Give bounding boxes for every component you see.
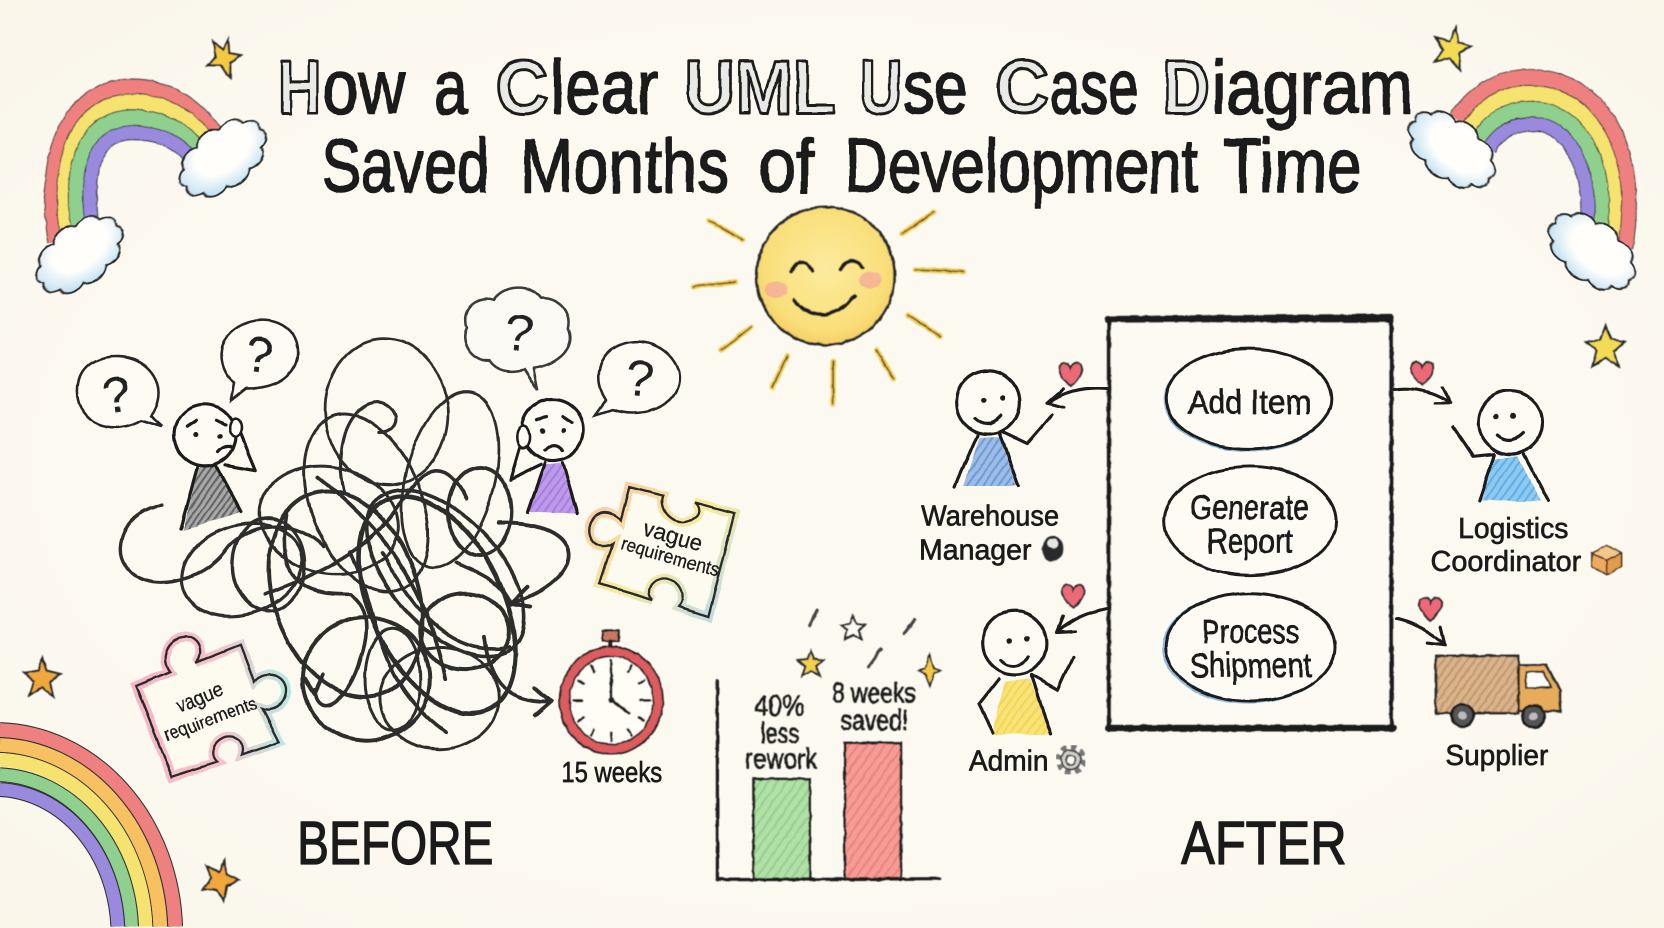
title line 1: iagram bbox=[1212, 46, 1414, 131]
title line 1: D bbox=[1163, 46, 1210, 131]
icon: cardboard box bbox=[1592, 545, 1622, 575]
title line 1: ow bbox=[323, 46, 406, 131]
confused person right bbox=[510, 399, 584, 514]
use case: Add Item: Add Item bbox=[1188, 384, 1311, 422]
star: left bbox=[24, 658, 60, 696]
puzzle piece right: vague bbox=[641, 516, 705, 556]
use case: Process Shipment bbox=[1163, 593, 1335, 703]
confetti dashes bbox=[810, 610, 915, 666]
label: 40% less rework: 40% bbox=[755, 690, 804, 722]
title line 1: C bbox=[496, 46, 549, 131]
title line 2: of bbox=[759, 124, 815, 209]
bar chart bbox=[717, 610, 940, 880]
label: 40% less rework: less bbox=[761, 718, 799, 750]
use case: Process Shipment: Shipment bbox=[1190, 647, 1312, 685]
label: 40% less rework: rework bbox=[745, 743, 818, 775]
star: right bbox=[1587, 326, 1625, 366]
label: warehouse manager: Manager bbox=[919, 534, 1032, 566]
arrow to logistics coordinator bbox=[1394, 387, 1451, 403]
sun face bbox=[757, 207, 895, 345]
system boundary box bbox=[1108, 317, 1393, 728]
title line 1 bbox=[278, 46, 1414, 131]
sun rays bbox=[693, 212, 964, 404]
green bar bbox=[753, 779, 810, 880]
confused person left bbox=[174, 404, 256, 531]
truck bbox=[1436, 656, 1560, 727]
speech bubble 1 bbox=[77, 357, 162, 427]
title bbox=[278, 46, 1414, 209]
puzzle piece right: requirements bbox=[618, 534, 722, 582]
speech bubble 2 bbox=[221, 320, 298, 400]
title line 2: Time bbox=[1224, 124, 1362, 209]
chart axes bbox=[717, 680, 940, 880]
stopwatch bbox=[565, 630, 658, 749]
heading: after: AFTER bbox=[1181, 809, 1347, 878]
speech bubble 3: ? bbox=[623, 349, 657, 408]
star: bottom bbox=[203, 861, 239, 901]
cloud: top right rainbow upper bbox=[1395, 96, 1509, 204]
heart bbox=[1419, 598, 1442, 621]
title line 2: Saved bbox=[322, 124, 489, 209]
after section bbox=[919, 317, 1622, 878]
title line 1: a bbox=[433, 46, 468, 131]
puzzle piece left: vague bbox=[173, 679, 226, 718]
sun bbox=[693, 207, 964, 404]
label: 8 weeks saved bbox=[832, 678, 916, 737]
title line 1: se bbox=[903, 46, 968, 131]
speech bubble 1: ? bbox=[99, 364, 135, 424]
actor: logistics coordinator bbox=[1453, 391, 1548, 501]
star: top right bbox=[1435, 28, 1471, 70]
cloud: top left rainbow lower bbox=[22, 201, 137, 309]
label: logistics coordinator: Coordinator bbox=[1431, 546, 1582, 578]
cloud: top right rainbow lower bbox=[1535, 197, 1649, 306]
arrow to truck bbox=[1397, 619, 1445, 645]
tangled scribble bbox=[120, 333, 569, 749]
speech bubble 2: ? bbox=[241, 325, 277, 385]
star: yellow confetti bbox=[798, 651, 824, 676]
use case: Generate Report: Report bbox=[1207, 523, 1293, 561]
title line 2: Development bbox=[845, 124, 1198, 209]
title line 2: Months bbox=[520, 124, 729, 209]
actor: admin bbox=[978, 611, 1073, 734]
puzzle piece left: requirements bbox=[161, 693, 259, 745]
icon: gear bbox=[1059, 748, 1083, 772]
title line 1: ase bbox=[1050, 46, 1139, 131]
use case: Add Item bbox=[1165, 349, 1332, 450]
star: white confetti bbox=[842, 617, 865, 640]
arrow to admin bbox=[1057, 608, 1109, 632]
heart bbox=[1060, 363, 1082, 386]
arrow to warehouse manager bbox=[1047, 388, 1107, 408]
puzzle piece right bbox=[589, 487, 734, 617]
title line 1: C bbox=[995, 46, 1048, 131]
thought cloud bubble bbox=[465, 288, 571, 391]
heart bbox=[1411, 362, 1433, 385]
use case: Generate Report bbox=[1164, 467, 1336, 575]
heading: before: BEFORE bbox=[297, 809, 493, 878]
title line 1: U bbox=[860, 46, 902, 131]
red bar bbox=[845, 743, 901, 880]
title line 2 bbox=[322, 124, 1362, 209]
cloud: top left rainbow upper bbox=[166, 104, 280, 212]
title line 1: UML bbox=[684, 46, 835, 131]
heart bbox=[1062, 585, 1084, 608]
label: warehouse manager bbox=[919, 500, 1059, 566]
label: 8 weeks saved: 8 weeks bbox=[832, 678, 916, 710]
label: 15 weeks: 15 weeks bbox=[561, 757, 662, 789]
rainbow: top right bbox=[1456, 77, 1628, 248]
title line 1: H bbox=[278, 46, 322, 131]
puzzle piece left bbox=[136, 637, 287, 777]
use case: Process Shipment: Process bbox=[1202, 613, 1299, 651]
rainbow: top left bbox=[53, 87, 215, 242]
label: 40% less rework bbox=[745, 690, 818, 775]
label: warehouse manager: Warehouse bbox=[921, 500, 1059, 532]
actor: warehouse manager bbox=[955, 370, 1052, 486]
icon: tape roll bbox=[1042, 536, 1063, 561]
title line 1: lear bbox=[551, 46, 658, 131]
label: logistics coordinator: Logistics bbox=[1458, 513, 1568, 545]
rainbow: bottom left bbox=[0, 730, 175, 926]
label: admin: Admin bbox=[969, 745, 1048, 777]
star: top left bbox=[207, 39, 241, 77]
use case: Generate Report: Generate bbox=[1190, 489, 1308, 527]
sparkle bbox=[919, 655, 940, 686]
label: supplier: Supplier bbox=[1445, 740, 1549, 772]
label: logistics coordinator bbox=[1431, 513, 1582, 578]
label: 8 weeks saved: saved! bbox=[840, 705, 908, 737]
speech bubble 3 bbox=[595, 342, 680, 415]
before section bbox=[77, 288, 734, 878]
thought cloud bubble: ? bbox=[502, 303, 536, 363]
